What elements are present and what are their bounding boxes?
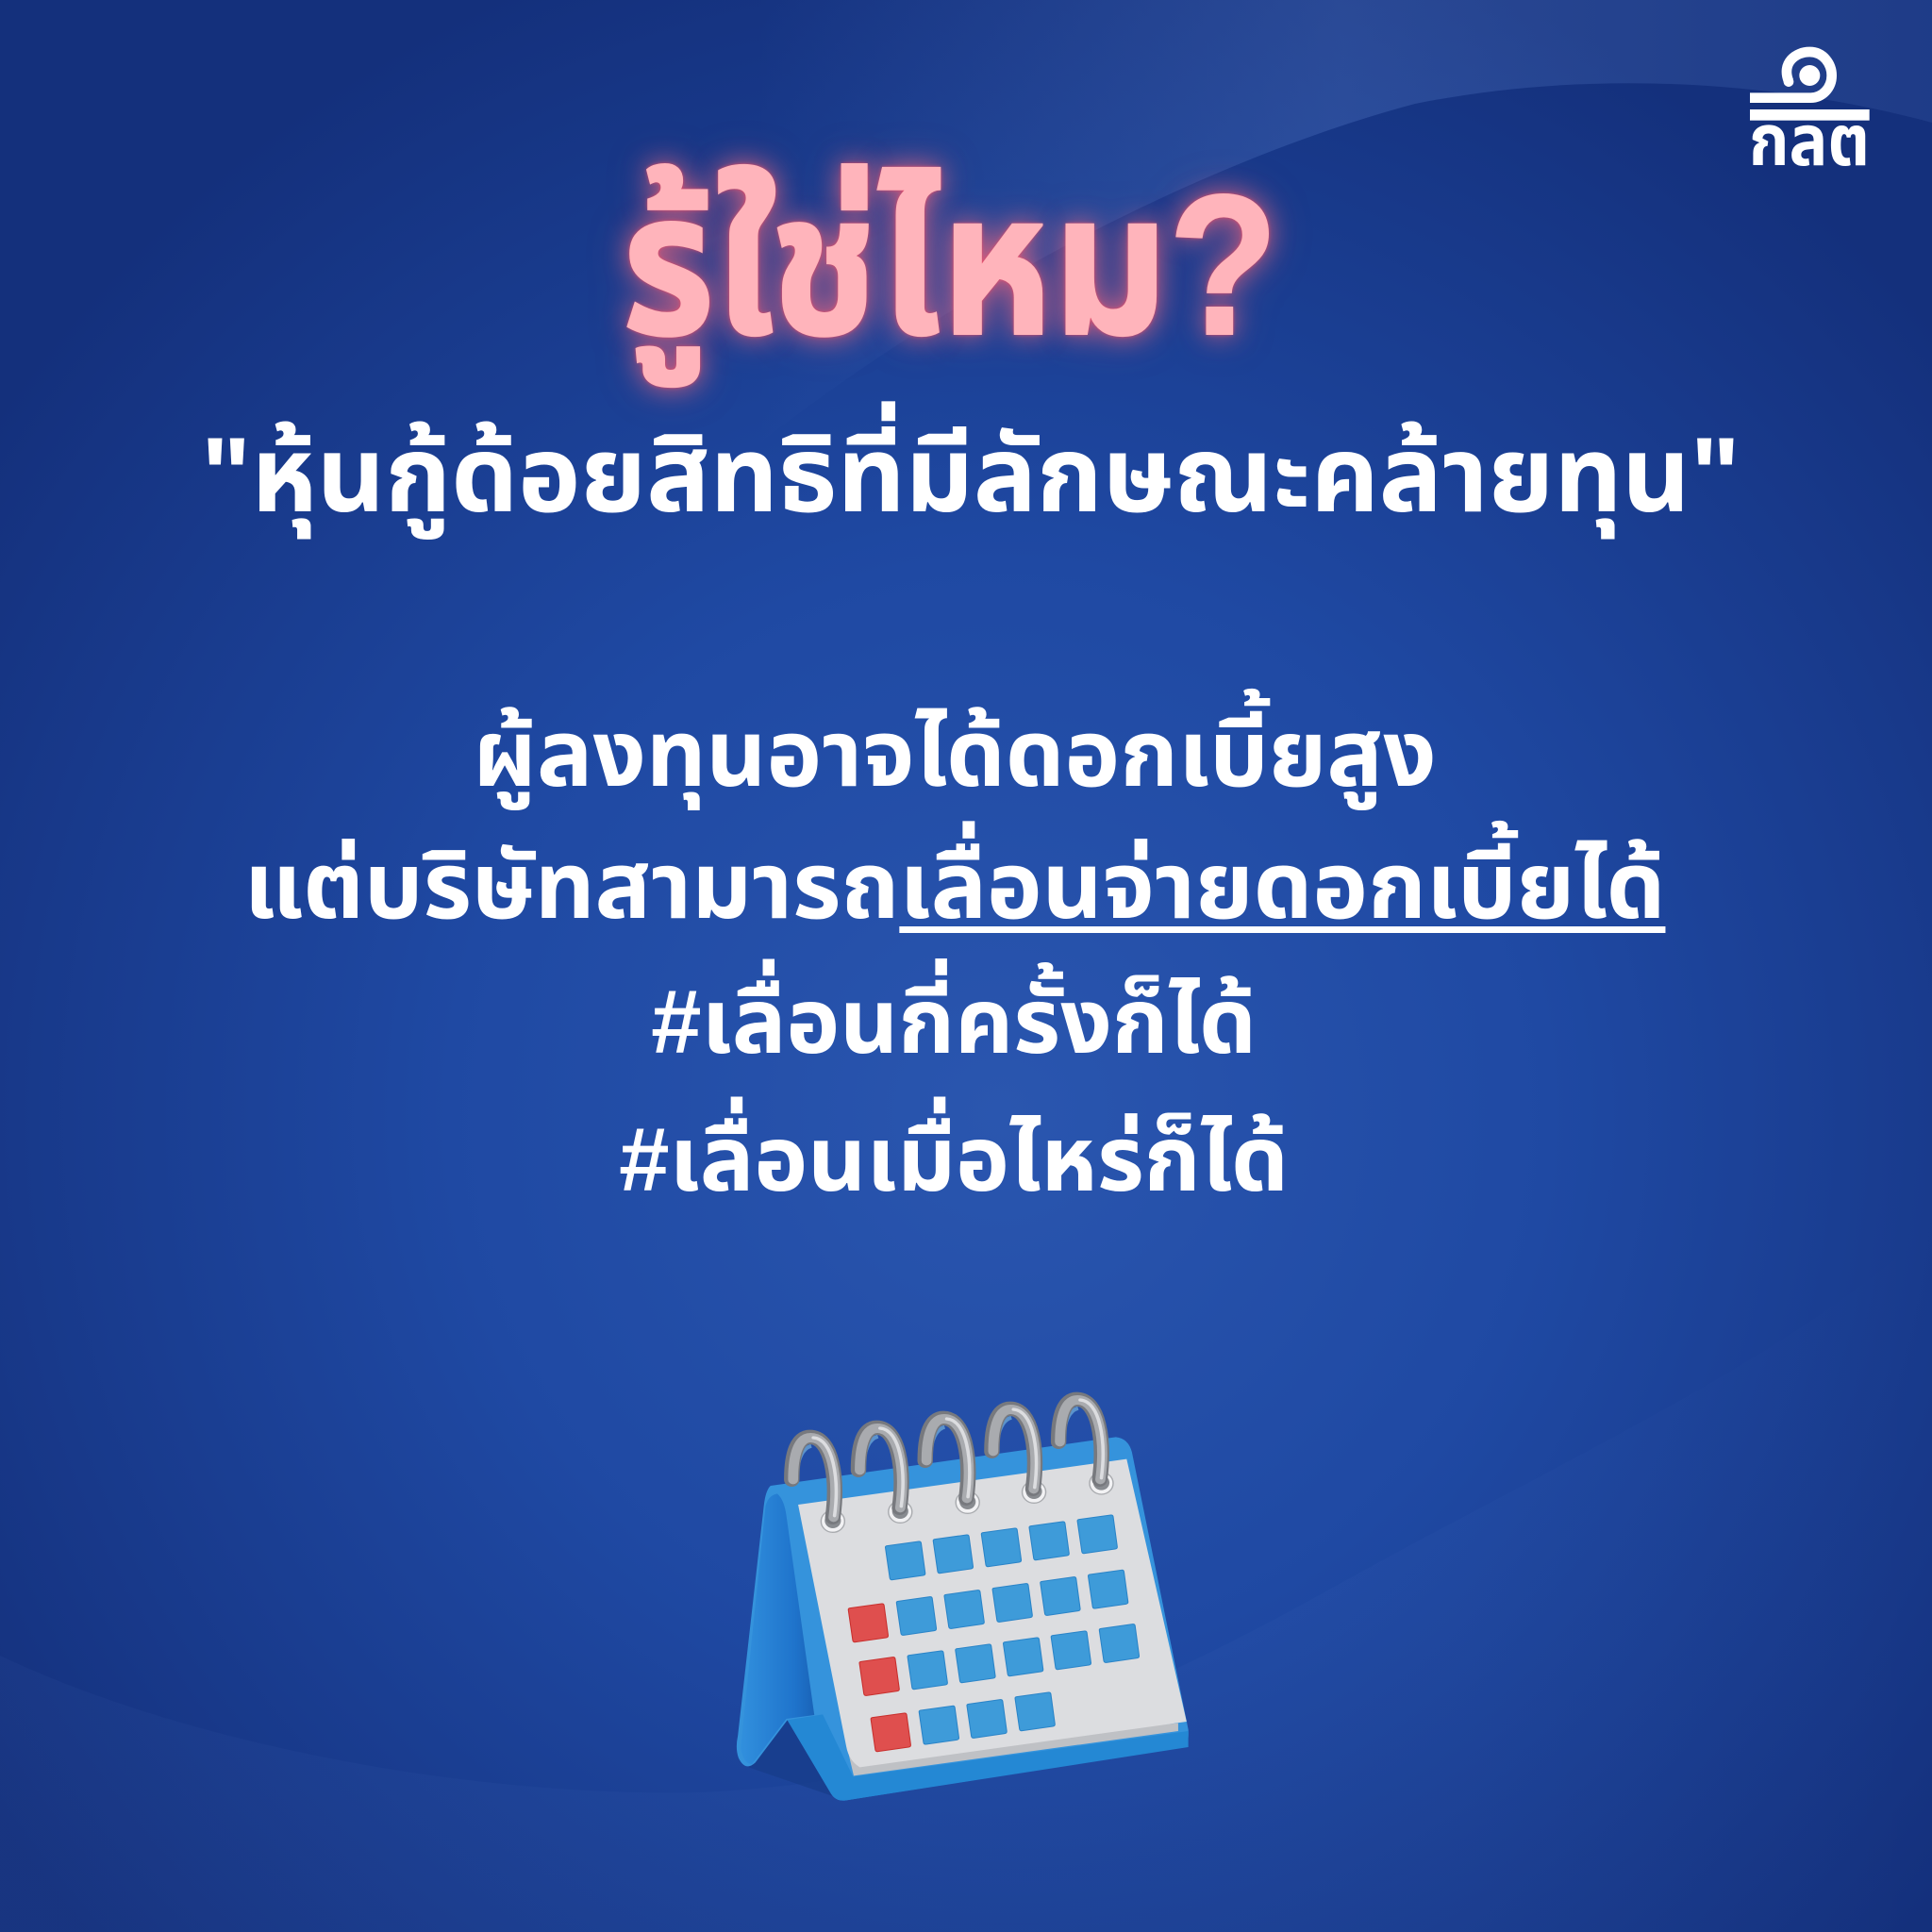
body line 2 with underlined phrase: แต่บริษัทสามารถเลื่อนจ่ายดอกเบี้ยได้ xyxy=(244,833,1665,938)
tent shadow xyxy=(749,1720,833,1796)
spiral binding rings xyxy=(791,1399,1113,1532)
calendar pages xyxy=(848,1724,1178,1775)
title: รู้ใช่ไหม? xyxy=(622,153,1278,376)
logo wordmark: กลต xyxy=(1749,101,1870,181)
logo mark xyxy=(1750,52,1870,121)
hashtag 1: #เลื่อนกี่ครั้งก็ได้ xyxy=(651,972,1257,1073)
calendar base xyxy=(737,1437,1189,1801)
calendar illustration xyxy=(737,1399,1189,1801)
calendar blue date squares xyxy=(886,1515,1140,1744)
body text block xyxy=(244,689,1666,1210)
hashtag 2: #เลื่อนเมื่อไหร่ก็ได้ xyxy=(619,1109,1289,1210)
subtitle: "หุ้นกู้ด้อยสิทธิที่มีลักษณะคล้ายทุน" xyxy=(201,416,1740,534)
calendar red date squares xyxy=(848,1604,910,1752)
body line 1: ผู้ลงทุนอาจได้ดอกเบี้ยสูง xyxy=(473,701,1437,806)
